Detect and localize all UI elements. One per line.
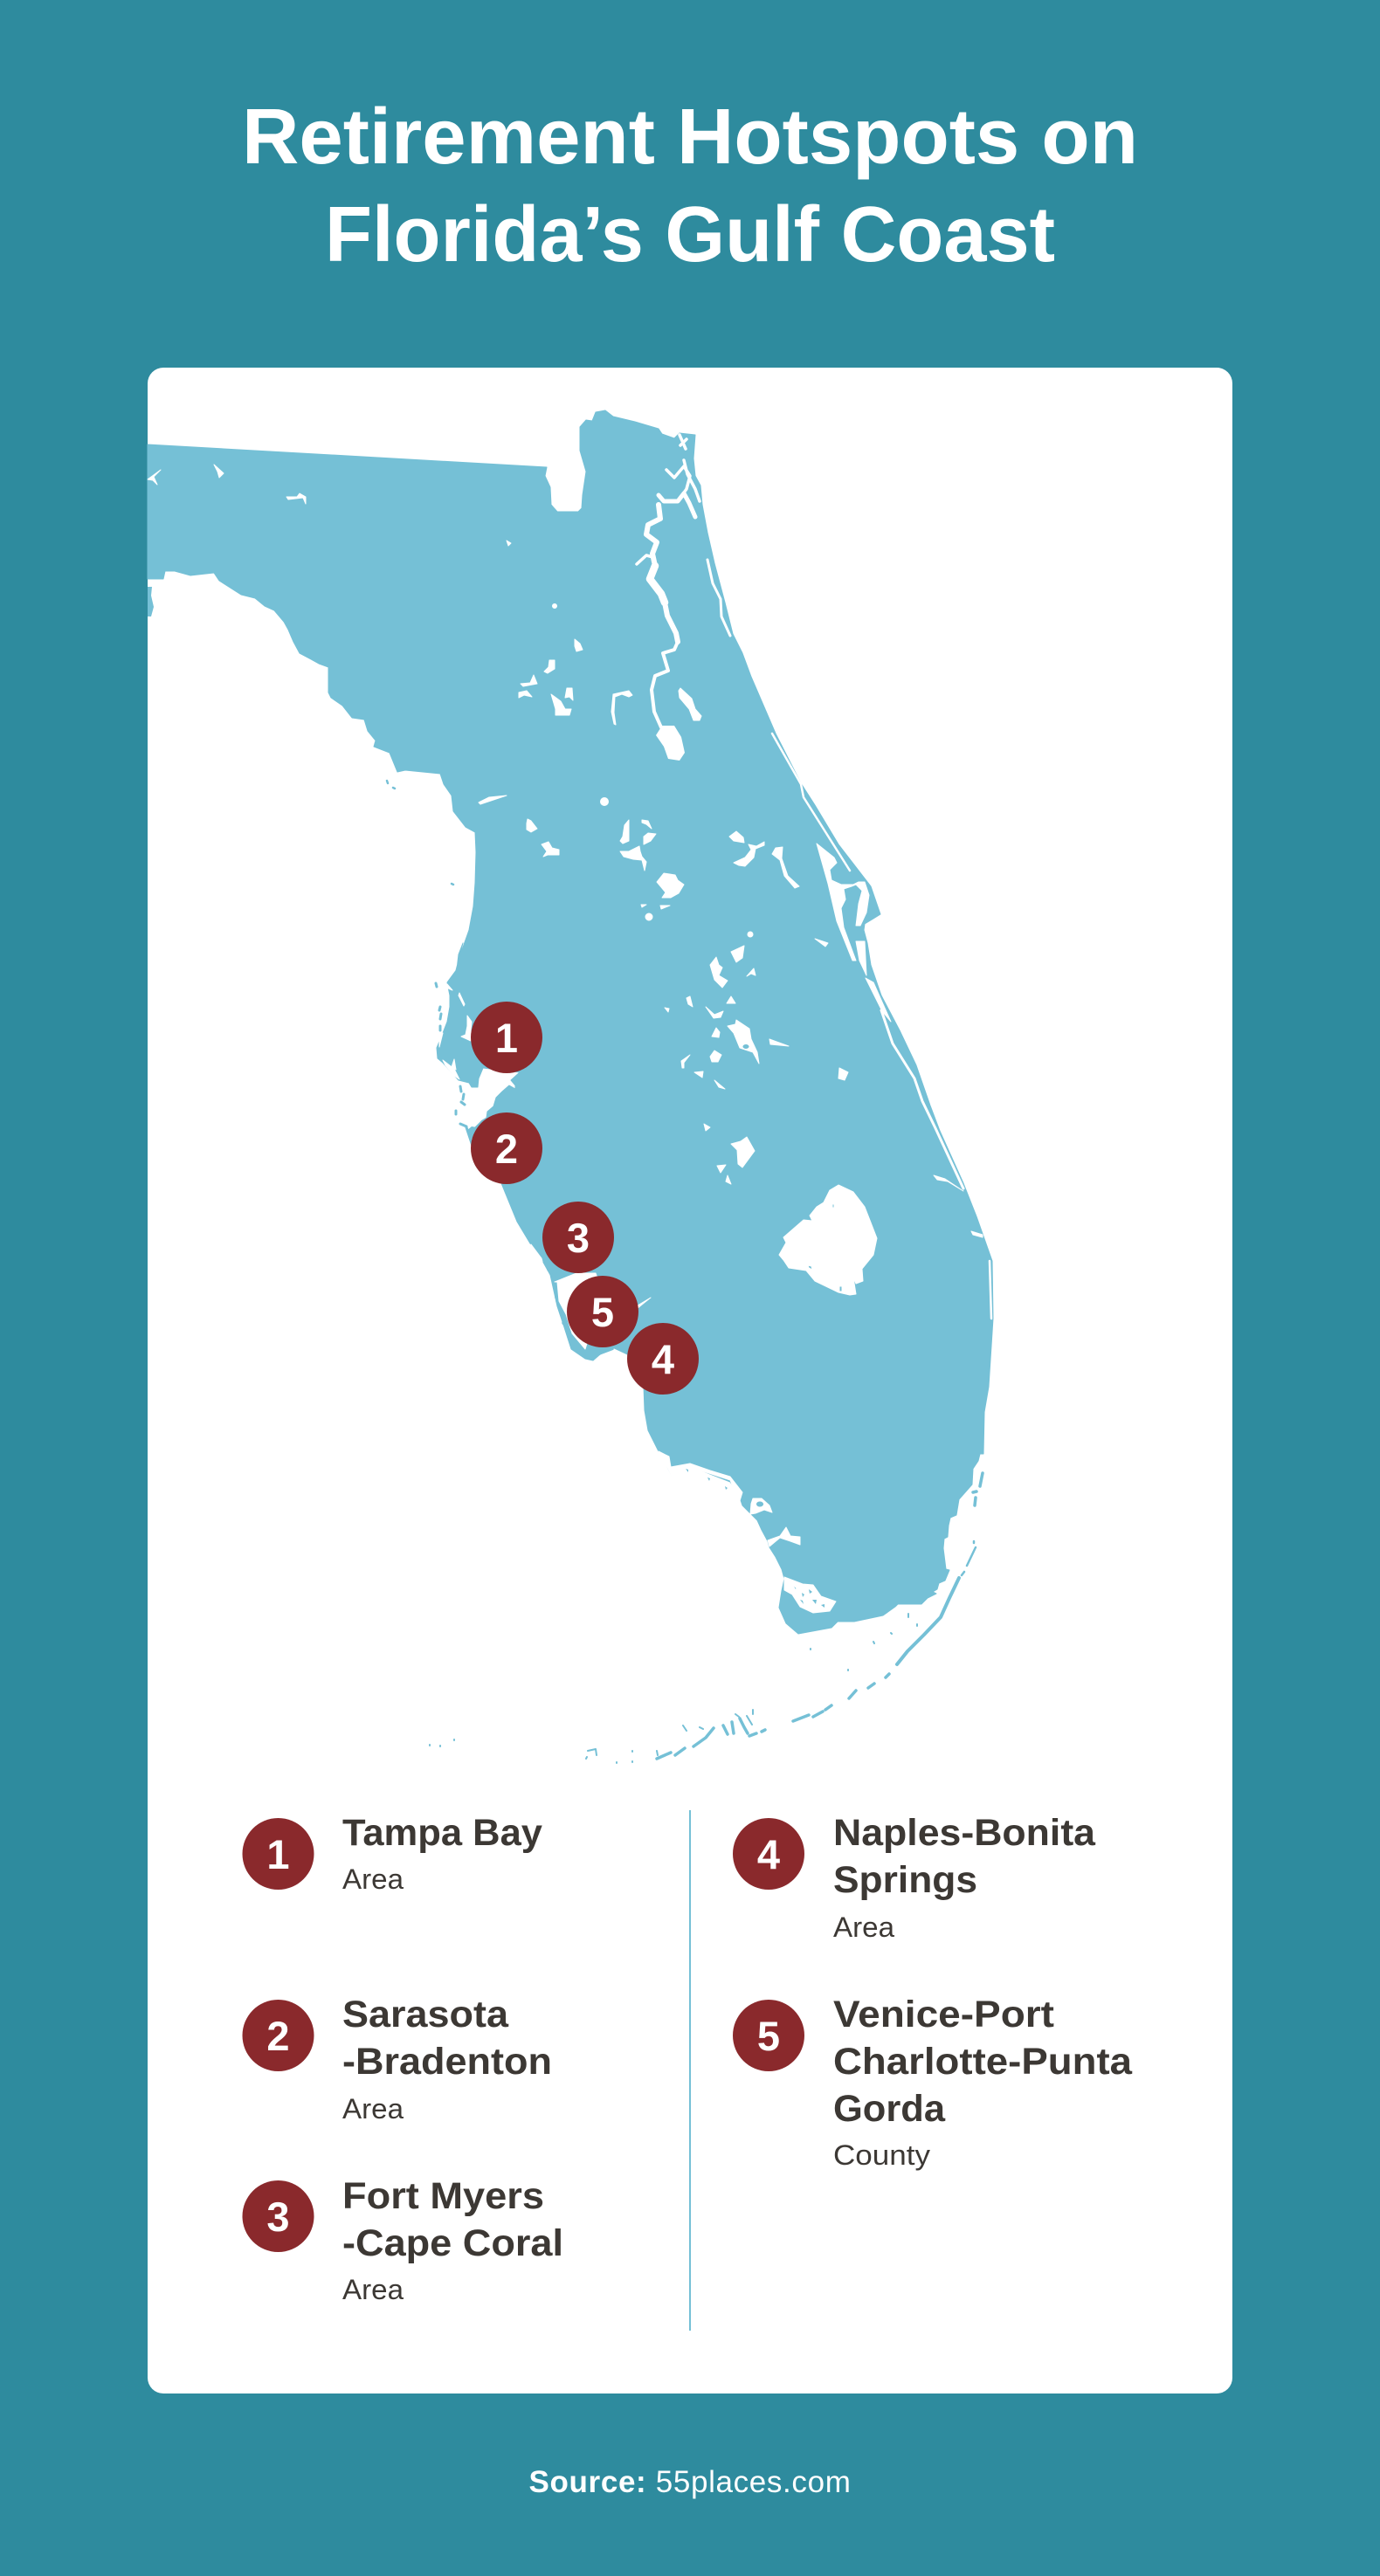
map marker 2: Sarasota-Bradenton	[471, 1112, 542, 1184]
legend item 1: Tampa Bay	[342, 1813, 542, 1854]
legend item 3	[243, 2176, 563, 2305]
legend item 4: Naples-Bonita	[833, 1813, 1095, 1854]
legend item 5: Gorda	[833, 2089, 945, 2130]
legend item 2: Area	[342, 2093, 404, 2125]
legend item 2: -Bradenton	[342, 2042, 552, 2083]
title	[242, 93, 1138, 279]
title: Florida’s Gulf Coast	[325, 191, 1055, 279]
map marker 4: Naples-Bonita Springs	[627, 1323, 699, 1395]
panhandle lakes	[148, 470, 161, 485]
blue land fragments along the coast	[148, 587, 602, 1360]
legend item 3: 3	[266, 2194, 290, 2240]
legend item 1	[243, 1813, 542, 1895]
legend	[243, 1810, 1132, 2331]
legend item 2	[243, 1994, 552, 2125]
Indian River wedge	[817, 844, 869, 961]
keys and offshore islands	[430, 1473, 983, 1763]
legend item 5	[733, 1994, 1132, 2171]
legend item 4: Springs	[833, 1860, 977, 1901]
legend item 3: Fort Myers	[342, 2176, 544, 2217]
legend item 4: 4	[757, 1831, 780, 1877]
rivers and thin channels	[637, 435, 991, 1608]
legend item 4	[733, 1813, 1095, 1943]
legend item 1: Area	[342, 1863, 404, 1895]
title: Retirement Hotspots on	[242, 93, 1138, 181]
map marker 1: Tampa Bay: 1	[495, 1015, 518, 1061]
legend item 4: Area	[833, 1911, 894, 1943]
map marker 1: Tampa Bay	[471, 1002, 542, 1073]
map marker 3: Fort Myers-Cape Coral: 3	[567, 1215, 590, 1261]
legend item 5: County	[833, 2139, 930, 2171]
panel: map and legend card	[148, 368, 1232, 2393]
blue islets inside whites	[671, 887, 859, 1608]
lakes and rivers	[148, 465, 983, 1613]
legend item 5: 5	[757, 2013, 780, 2059]
legend item 2: 2	[266, 2013, 290, 2059]
legend item 3: Area	[342, 2274, 404, 2305]
legend item 5: Charlotte-Punta	[833, 2042, 1132, 2083]
map marker 3: Fort Myers-Cape Coral	[542, 1202, 614, 1273]
central lakes	[620, 820, 629, 844]
south Biscayne and Whitewater whites	[784, 1577, 836, 1613]
Charlotte Harbor white	[555, 1273, 603, 1349]
legend item 5: Venice-Port	[833, 1994, 1054, 2035]
legend item 2: Sarasota	[342, 1994, 508, 2035]
Tampa area inland whites	[459, 993, 465, 1006]
map of Florida	[148, 410, 993, 1763]
map marker 4: Naples-Bonita Springs: 4	[652, 1336, 674, 1382]
map marker 5: Venice-Port Charlotte-Punta Gorda: 5	[591, 1289, 614, 1335]
map marker 2: Sarasota-Bradenton: 2	[495, 1126, 518, 1172]
map marker 5: Venice-Port Charlotte-Punta Gorda	[567, 1276, 638, 1347]
legend item 1: 1	[266, 1831, 290, 1877]
Lake Okeechobee	[779, 1185, 877, 1295]
land mass	[148, 410, 993, 1634]
source note: Source: 55places.com	[529, 2465, 851, 2499]
legend item 3: -Cape Coral	[342, 2223, 563, 2264]
